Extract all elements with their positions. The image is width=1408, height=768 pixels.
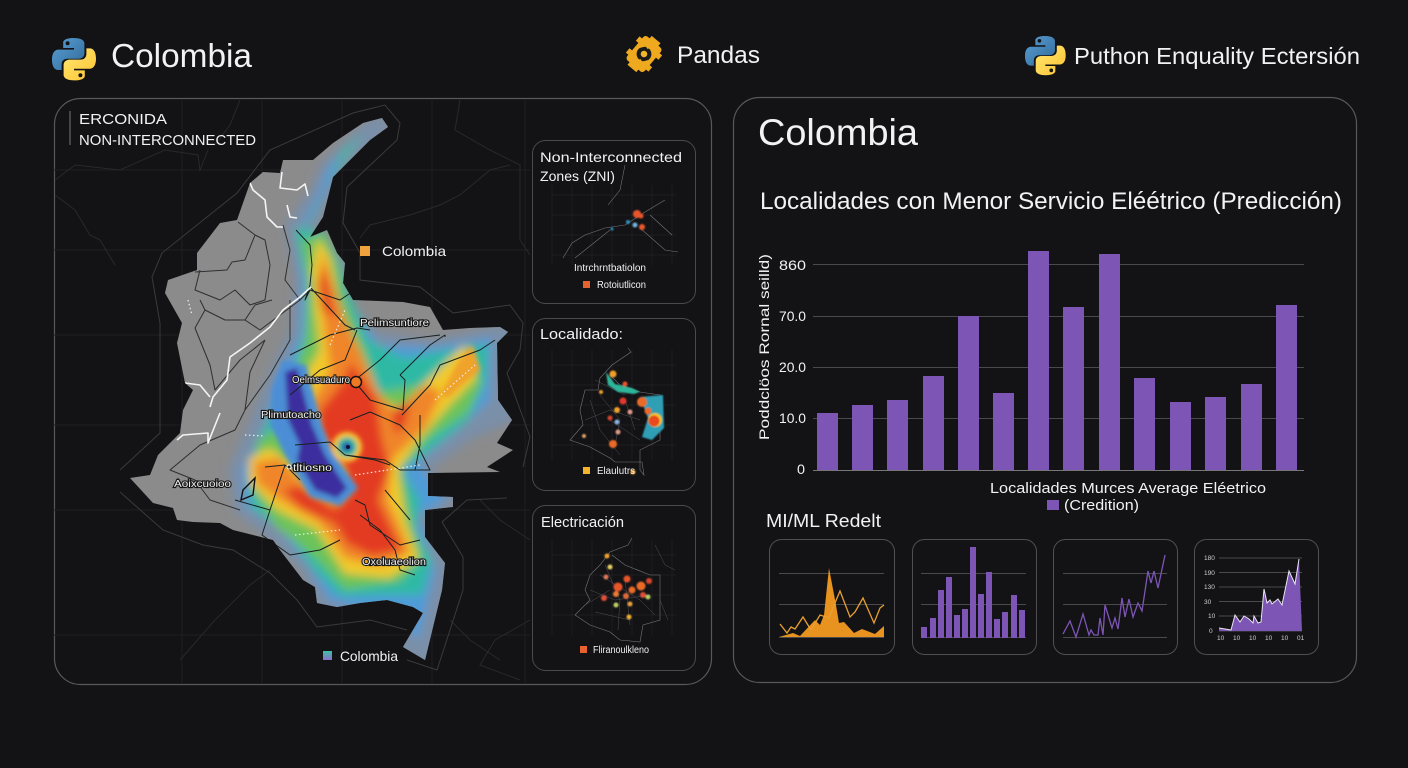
outline: surrounding borders <box>120 105 530 670</box>
heading: MI/ML Redelt: MI/ML Redelt <box>766 511 881 531</box>
text: Pandas: Pandas <box>677 42 760 69</box>
inset panel: Localidado: Localidado: <box>540 327 623 343</box>
inset panel: Non-Interconnected Zones: Rotoiutlicon <box>597 280 646 291</box>
mini chart: purple line <box>1054 540 1178 654</box>
panel: map <box>54 98 712 684</box>
legend: Colombia gradient: Colombia <box>340 648 398 664</box>
axis labels: 860 <box>779 257 806 273</box>
mini chart: purple area with labels: 30 <box>1204 599 1212 606</box>
mini chart: purple area with labels: 130 <box>1204 584 1215 591</box>
legend block: ERCONIDA: NON-INTERCONNECTED <box>79 132 256 149</box>
axis labels: 0 <box>797 461 805 477</box>
mini chart: purple area with labels: 10 <box>1217 635 1225 642</box>
header: pandas <box>621 30 760 78</box>
mini chart: purple area with labels: 10 <box>1281 635 1289 642</box>
title: Colombia: Colombia <box>111 37 253 74</box>
mini chart: purple area with labels: 10 <box>1249 635 1257 642</box>
map label: tltiosno <box>293 462 332 474</box>
mini chart: purple area with labels: 190 <box>1204 570 1215 577</box>
inset panel: Non-Interconnected Zones <box>532 140 696 304</box>
axis labels: 10.0 <box>779 410 806 426</box>
inset panel: Non-Interconnected Zones: Intrchrntbatiolon <box>574 263 646 274</box>
header: python logo and Colombia <box>52 37 253 80</box>
choropleth map: Colombia <box>130 115 515 670</box>
mini chart: purple area with labels: 01 <box>1297 635 1305 642</box>
inset panel: Localidado: Elaulutrs <box>597 466 635 477</box>
map label: Oelmsuaduro <box>292 374 350 386</box>
dark boundary lines on grey area <box>170 222 310 510</box>
mini chart: purple area with labels: 0 <box>1209 628 1213 635</box>
map label: Oxoluaeolion <box>362 556 426 568</box>
bar chart: main <box>756 251 1304 514</box>
icon: pandas gear <box>621 30 667 78</box>
map label: Pelimsuntiore <box>360 317 429 329</box>
legend: Colombia orange <box>360 243 446 259</box>
map label: Plimutoacho <box>261 409 321 421</box>
x axis legend <box>990 480 1266 514</box>
y axis title: Poddclöos Rornal seilld) <box>756 254 772 440</box>
mini chart: purple area with labels: 10 <box>1233 635 1241 642</box>
x axis legend: (Credition) <box>1064 497 1139 514</box>
inset panel: Electricación: Fliranoulkleno <box>593 645 649 656</box>
inset panel: Non-Interconnected Zones: Non-Interconnected <box>540 149 682 165</box>
header: python extension <box>1025 36 1360 75</box>
legend block: ERCONIDA: ERCONIDA <box>79 111 167 128</box>
inset panel: Electricación <box>532 506 696 670</box>
x axis legend: Localidades Murces Average Eléetrico <box>990 480 1266 497</box>
mini chart: purple area with labels: 10 <box>1265 635 1273 642</box>
map label: Aoixcuoioo <box>174 478 231 490</box>
mini chart: orange area <box>770 540 894 654</box>
axis labels: 20.0 <box>779 359 806 375</box>
inset panel: Electricación: Electricación <box>541 515 624 531</box>
axis labels: 70.0 <box>779 308 806 324</box>
icon: python logo right <box>1025 36 1066 75</box>
axis labels <box>779 257 806 477</box>
legend block: ERCONIDA <box>70 111 256 149</box>
mini chart: purple bars <box>912 540 1036 654</box>
icon: python logo left <box>52 38 96 80</box>
inset panel: Localidado <box>532 318 696 490</box>
mini chart: purple area with labels: 180 <box>1204 555 1215 562</box>
panel: chart <box>734 98 1356 682</box>
mini chart: purple area with labels <box>1194 540 1318 654</box>
text: Puthon Enquality Ectersión: Puthon Enquality Ectersión <box>1074 43 1360 69</box>
legend: Colombia orange: Colombia <box>382 243 446 259</box>
mini chart: purple area with labels: 10 <box>1208 613 1216 620</box>
heading: chart title: Localidades con Menor Servicio Eléétrico (Predicción) <box>760 188 1342 215</box>
heading: Colombia: Colombia <box>758 112 918 153</box>
inset panel: Non-Interconnected Zones: Zones (ZNI) <box>540 168 615 184</box>
